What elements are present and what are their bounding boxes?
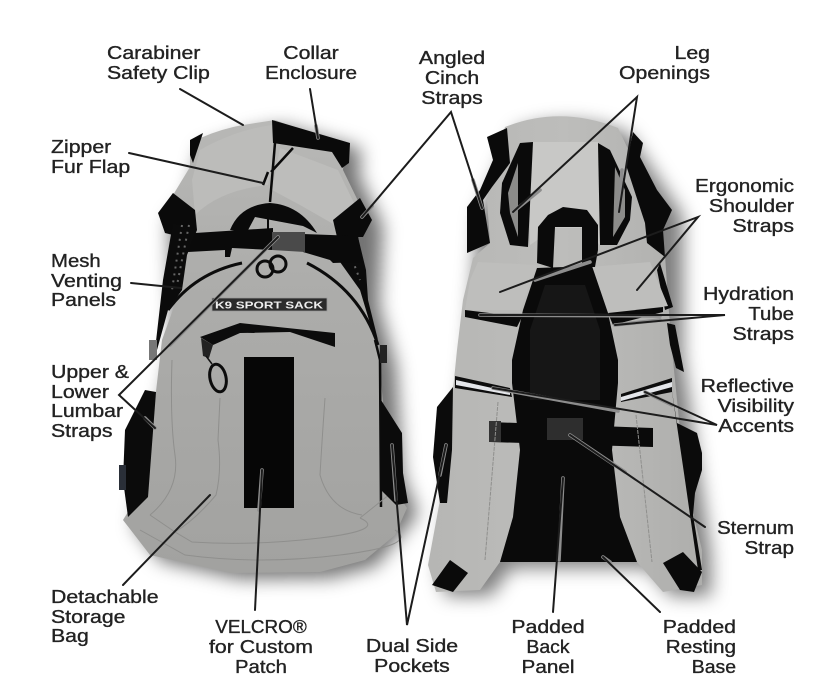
pointer: hydration tube — [480, 315, 725, 325]
hydration tube strap right — [608, 307, 663, 325]
reflective accent right — [621, 378, 672, 402]
label: detachable storage bag: Bag — [51, 626, 89, 647]
panel: front view of backpack — [119, 120, 418, 579]
label: hydration tube straps: Straps — [733, 324, 794, 345]
seam stitching — [485, 402, 652, 562]
label: leg openings — [619, 43, 710, 84]
label: sternum strap: Sternum — [717, 518, 794, 539]
left side pocket — [123, 390, 156, 517]
label: angled cinch straps — [419, 48, 485, 109]
right upper side strap — [657, 263, 673, 310]
leg opening right — [598, 143, 632, 245]
right cinch buckle — [333, 198, 372, 237]
waist strap — [188, 228, 362, 263]
label: upper and lower lumbar straps — [51, 362, 129, 442]
label: reflective visibility accents: Accents — [718, 416, 794, 437]
shoulder fold — [465, 262, 668, 313]
brand logo patch — [212, 298, 327, 312]
carabiner side strap — [190, 133, 203, 163]
hood highlight — [530, 142, 600, 245]
label: carabiner safety clip — [107, 43, 210, 84]
pointer: velcro — [255, 470, 262, 610]
label: mesh venting panels: Venting — [51, 271, 122, 292]
label: padded resting base: Padded — [663, 617, 736, 638]
pointer: leg openings — [513, 97, 637, 212]
pointer: shoulder straps — [500, 217, 698, 292]
left strap adjuster — [149, 340, 157, 360]
label: velcro for custom patch: VELCRO® — [215, 616, 307, 637]
left cinch buckle — [158, 193, 197, 235]
left mesh venting panel — [155, 223, 197, 350]
label: mesh venting panels — [51, 251, 122, 311]
label: padded back panel: Panel — [522, 657, 574, 678]
label: reflective visibility accents — [701, 376, 794, 437]
left side pocket — [433, 387, 453, 503]
label: carabiner safety clip: Carabiner — [107, 43, 201, 64]
pocket zipper — [200, 323, 335, 347]
label: angled cinch straps: Cinch — [425, 68, 479, 89]
label: reflective visibility accents: Reflective — [701, 376, 794, 397]
pointer: back panel — [553, 478, 563, 612]
label: velcro for custom patch: Patch — [235, 657, 287, 678]
right side pocket — [381, 400, 408, 505]
right strap adjuster — [380, 345, 387, 363]
right mesh venting panel — [337, 235, 378, 340]
fabric fold seams — [140, 360, 401, 560]
label: angled cinch straps: Straps — [421, 88, 483, 109]
chest buckle — [272, 232, 305, 252]
label: collar enclosure: Enclosure — [265, 63, 357, 84]
label: upper and lower lumbar straps: Lumbar — [51, 401, 123, 422]
cord through the handle — [267, 217, 269, 232]
pointer: carabiner — [180, 89, 243, 125]
label: padded back panel — [511, 617, 585, 678]
label: zipper fur flap: Fur Flap — [51, 157, 130, 178]
main zipper arc — [168, 263, 378, 345]
label: hydration tube straps — [703, 284, 794, 345]
right outer strap — [626, 132, 672, 257]
label: hydration tube straps: Tube — [748, 304, 794, 325]
padded back mesh texture — [530, 285, 600, 400]
label: ergonomic shoulder straps: Straps — [733, 216, 794, 237]
hood highlight — [192, 125, 275, 215]
collar enclosure strap — [272, 120, 350, 168]
hydration tube strap left — [465, 310, 522, 327]
label: upper and lower lumbar straps: Lower — [51, 382, 109, 403]
label: ergonomic shoulder straps — [695, 176, 794, 237]
right edge strip — [375, 340, 381, 507]
label: sternum strap: Strap — [745, 538, 794, 559]
center top loop — [537, 207, 598, 268]
label: detachable storage bag: Detachable — [51, 587, 159, 608]
left outer strap — [467, 128, 510, 253]
pointer: sternum — [570, 435, 705, 527]
label: upper and lower lumbar straps: Straps — [51, 421, 112, 442]
bottom strap right — [663, 552, 702, 592]
pointer: mesh — [131, 283, 181, 288]
label: detachable storage bag — [51, 587, 159, 647]
center padded mesh panel — [500, 266, 637, 562]
label: upper and lower lumbar straps: Upper & — [51, 362, 129, 383]
label: dual side pockets: Pockets — [374, 656, 450, 677]
pointer: cinch straps — [362, 112, 482, 217]
handle arch — [230, 203, 317, 233]
pointer: reflective — [493, 388, 717, 425]
zipper pull with clip — [201, 338, 229, 393]
safety cord and clip — [263, 143, 293, 202]
back body fabric — [428, 116, 702, 592]
label: collar enclosure — [265, 43, 357, 84]
label: dual side pockets: Dual Side — [366, 636, 458, 657]
label: mesh venting panels: Panels — [51, 290, 116, 311]
front body fabric — [123, 120, 407, 573]
brand logo patch: K9 SPORT SACK — [215, 300, 324, 312]
label: dual side pockets — [366, 636, 458, 677]
left pocket strap tab — [119, 465, 126, 490]
label: reflective visibility accents: Visibility — [718, 396, 794, 417]
label: padded resting base: Base — [692, 657, 736, 678]
pointer: resting base — [603, 557, 660, 612]
label: velcro for custom patch: for Custom — [209, 637, 313, 658]
label: zipper fur flap — [51, 137, 130, 178]
label: ergonomic shoulder straps: Shoulder — [709, 196, 794, 217]
reflective accent left — [455, 376, 512, 397]
d-rings — [257, 256, 286, 277]
label: padded resting base — [663, 617, 736, 678]
pointer: lumbar — [119, 237, 278, 428]
label: hydration tube straps: Hydration — [703, 284, 794, 305]
velcro patch — [244, 357, 294, 508]
mesh holes — [172, 225, 360, 290]
label: ergonomic shoulder straps: Ergonomic — [695, 176, 794, 197]
leg opening left — [500, 142, 533, 247]
pointer: side pockets — [392, 445, 446, 625]
bottom strap left — [432, 560, 468, 592]
pointer: collar — [310, 89, 318, 138]
sternum strap — [489, 418, 653, 447]
panel: back view of backpack — [428, 116, 711, 596]
pointer: zipper flap — [129, 153, 263, 183]
label: mesh venting panels: Mesh — [51, 251, 101, 272]
label: collar enclosure: Collar — [283, 43, 339, 64]
label: padded back panel: Padded — [511, 617, 585, 638]
label: leg openings: Leg — [675, 43, 710, 64]
label: sternum strap — [717, 518, 794, 559]
label: carabiner safety clip: Safety Clip — [107, 63, 210, 84]
label: padded resting base: Resting — [666, 637, 736, 658]
label: angled cinch straps: Angled — [419, 48, 485, 69]
pointer: detachable bag — [123, 495, 210, 585]
label: leg openings: Openings — [619, 63, 710, 84]
label: velcro for custom patch — [209, 616, 313, 678]
right buckle strap — [667, 323, 684, 372]
label: padded back panel: Back — [526, 637, 570, 658]
label: zipper fur flap: Zipper — [51, 137, 112, 158]
label: detachable storage bag: Storage — [51, 607, 125, 628]
right side strap — [671, 385, 702, 570]
